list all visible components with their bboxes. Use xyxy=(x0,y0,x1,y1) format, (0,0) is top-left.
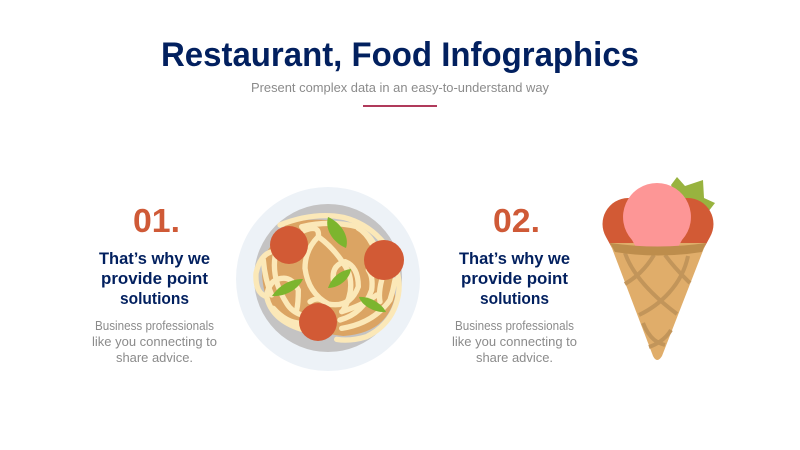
panel: item 01 text xyxy=(92,202,217,365)
body text 02: like you connecting to xyxy=(452,334,577,349)
meatballs xyxy=(270,226,404,341)
body text 01: share advice. xyxy=(116,350,193,365)
body text 02 xyxy=(452,318,577,365)
cone rim xyxy=(610,243,706,256)
heading 01: provide point xyxy=(101,269,208,288)
body text 01 xyxy=(92,318,217,365)
subtitle: Present complex data in an easy-to-understand way xyxy=(251,80,549,95)
body text 02: share advice. xyxy=(476,350,553,365)
body text 01: Business professionals xyxy=(95,318,214,333)
heading 01 xyxy=(99,249,210,308)
icon: spaghetti plate xyxy=(236,187,420,371)
leaves xyxy=(671,177,715,218)
accent divider xyxy=(363,105,437,107)
body text 01: like you connecting to xyxy=(92,334,217,349)
basil leaves xyxy=(272,217,386,312)
heading 02: provide point xyxy=(461,269,568,288)
heading 02 xyxy=(459,249,570,308)
heading 01: solutions xyxy=(120,289,189,308)
number 01: 01. xyxy=(133,202,180,239)
panel: item 02 text xyxy=(452,202,577,365)
waffle lines xyxy=(625,253,690,347)
heading 02: solutions xyxy=(480,289,549,308)
title: Restaurant, Food Infographics xyxy=(161,36,639,74)
body text 02: Business professionals xyxy=(455,318,574,333)
icon: ice cream cone xyxy=(603,177,715,360)
number 02: 02. xyxy=(493,202,540,239)
heading 01: That’s why we xyxy=(99,249,210,268)
red scoops xyxy=(603,198,713,248)
pink scoop xyxy=(623,183,691,249)
heading 02: That’s why we xyxy=(459,249,570,268)
cone xyxy=(610,243,706,360)
